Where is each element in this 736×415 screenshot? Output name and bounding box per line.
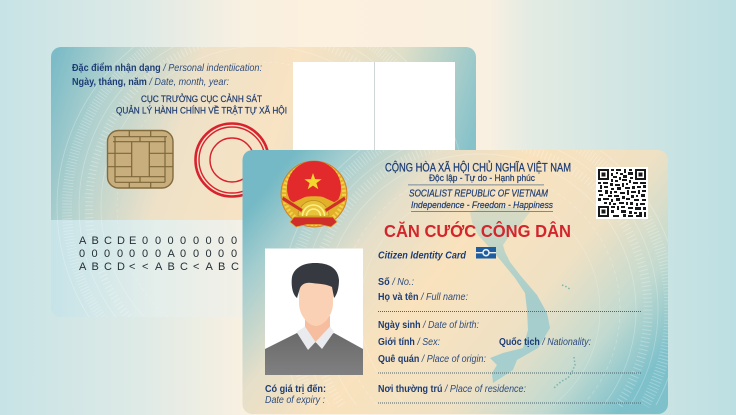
red field: [287, 161, 341, 203]
icon: chip symbol: [476, 247, 496, 258]
machine readable lines: ABCD<<ABC<ABC: [79, 261, 239, 273]
face: [299, 281, 333, 326]
map of Vietnam: [470, 206, 575, 389]
sweater: [265, 333, 363, 375]
english motto: Independence - Freedom - Happiness: [411, 200, 553, 211]
icon: QR code: [596, 167, 648, 219]
english national title: SOCIALIST REPUBLIC OF VIETNAM: [409, 188, 549, 200]
field: sex: Giới tính / Sex:: [378, 337, 440, 348]
expiry label: [265, 383, 326, 406]
wreath: [281, 161, 347, 227]
panel: back of card: [51, 47, 476, 317]
field: number: Số / No.:: [378, 276, 414, 288]
machine readable lines: [79, 235, 239, 273]
issuer department: QUẢN LÝ HÀNH CHÍNH VỀ TRẬT TỰ XÃ HỘI: [116, 104, 287, 116]
lower machine readable strip: [51, 220, 476, 317]
card name: Citizen Identity Card: [378, 250, 467, 262]
machine readable lines: 0000000A00000: [79, 248, 237, 260]
heading lines: Đặc điểm nhận dạng / Personal indentiication:: [72, 62, 262, 74]
panel: front of card: [242, 150, 668, 414]
back card drum pattern: [56, 47, 460, 317]
rule two: [411, 210, 553, 213]
expiry label: Có giá trị đến:: [265, 383, 326, 395]
field: place of residence: Nơi thường trú / Place of residence:: [378, 384, 526, 395]
gear: [298, 200, 329, 216]
red title: CĂN CƯỚC CÔNG DÂN: [384, 220, 571, 241]
hair: [292, 263, 339, 298]
machine readable lines: ABCDE00000000: [79, 235, 237, 247]
field: place of origin: Quê quán / Place of origin:: [378, 354, 486, 365]
field: full name: Họ và tên / Full name:: [378, 292, 468, 303]
star: [304, 173, 322, 189]
portrait photo: [265, 248, 363, 375]
front card drum pattern: [290, 150, 668, 408]
icon: national emblem: [281, 161, 347, 227]
date line: Ngày, tháng, năm / Date, month, year:: [72, 77, 229, 88]
motto: Độc lập - Tự do - Hạnh phúc: [429, 173, 535, 183]
field: nationality: Quốc tịch / Nationality:: [499, 336, 591, 348]
expiry label: Date of expiry :: [265, 395, 325, 406]
issuer title: CỤC TRƯỞNG CỤC CẢNH SÁT: [141, 93, 262, 104]
rule one: [408, 184, 544, 186]
national title: CỘNG HÒA XÃ HỘI CHỦ NGHĨA VIỆT NAM: [385, 162, 571, 174]
neck: [305, 316, 330, 343]
ribbon: [282, 196, 346, 227]
collar: [296, 326, 334, 350]
icon: red stamp: [196, 124, 268, 196]
white fingerprint boxes: [293, 62, 455, 162]
icon: chip: [108, 130, 173, 188]
field: date of birth: Ngày sinh / Date of birth:: [378, 320, 479, 331]
